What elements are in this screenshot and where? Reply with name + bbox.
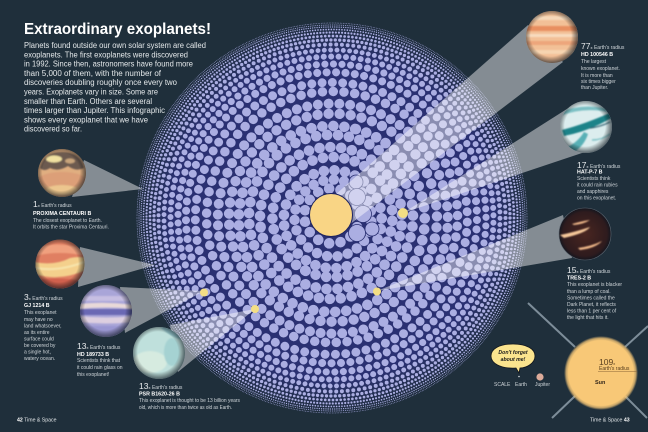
label: TrES-2 b: than a lump of coal. bbox=[567, 289, 611, 295]
label: TrES-2 b: less than 1 per cent of bbox=[567, 308, 617, 314]
speech bubble: about me! bbox=[501, 357, 526, 363]
scale comparison: SCALE bbox=[494, 382, 511, 388]
label: TrES-2 b: 15x Earth's radius bbox=[567, 265, 611, 275]
scale comparison bbox=[494, 373, 550, 388]
sun: Sun bbox=[595, 380, 606, 386]
label: HD 189733 b: Scientists think that bbox=[77, 358, 121, 364]
footer left: 42 Time & Space bbox=[17, 418, 57, 424]
label: GJ 1214 b: watery ocean. bbox=[24, 356, 55, 362]
label: HAT-P-7 b: Scientists think bbox=[577, 176, 611, 182]
marker: PSR B1620-26 b dot bbox=[251, 305, 259, 313]
label: HD 100546 b: six times bigger bbox=[581, 79, 616, 85]
label: GJ 1214 b: 3x Earth's radius bbox=[24, 292, 63, 302]
label: HD 189733 b bbox=[77, 341, 123, 378]
label: GJ 1214 b bbox=[24, 292, 63, 362]
label: HD 100546 b: known exoplanet. bbox=[581, 66, 620, 72]
label: GJ 1214 b: surface could bbox=[24, 336, 54, 342]
label: HAT-P-7 b: it could rain rubies bbox=[577, 182, 618, 188]
label: GJ 1214 b: GJ 1214 B bbox=[24, 303, 50, 309]
label: GJ 1214 b: a single hot, bbox=[24, 350, 51, 356]
intro text: than 5,000 of them, with the number of bbox=[24, 69, 162, 78]
intro text: discovered so far. bbox=[24, 125, 82, 134]
intro text: times larger than Jupiter. This infographic bbox=[24, 106, 165, 115]
marker: TrES-2 b dot bbox=[373, 288, 381, 296]
sun: Earth's radius bbox=[599, 366, 630, 372]
footer right: Time & Space 43 bbox=[590, 418, 630, 424]
planet: HD 189733 b bbox=[78, 285, 134, 337]
label: HAT-P-7 b: and sapphires bbox=[577, 189, 609, 195]
label: Proxima Centauri b: 1x Earth's radius bbox=[33, 199, 72, 209]
label: GJ 1214 b: as its entire bbox=[24, 330, 50, 336]
label: Proxima Centauri b: PROXIMA CENTAURI B bbox=[33, 211, 91, 217]
label: TrES-2 b: TRES-2 B bbox=[567, 276, 591, 282]
planet: HD 100546 b bbox=[526, 11, 578, 63]
intro text: in 1992. Since then, astronomers have found more bbox=[24, 60, 194, 69]
label: HAT-P-7 b: 17x Earth's radius bbox=[577, 160, 621, 170]
speech bubble: Don't forget bbox=[498, 350, 528, 356]
label: TrES-2 b: the light that hits it. bbox=[567, 315, 609, 321]
chart: every known exoplanet as a dot bbox=[104, 0, 560, 432]
scale comparison: Jupiter bbox=[535, 382, 550, 388]
label: GJ 1214 b: be covered by bbox=[24, 343, 56, 349]
label: HAT-P-7 b: HAT-P-7 B bbox=[577, 170, 603, 176]
scale comparison: Earth bbox=[515, 382, 527, 388]
intro text: Planets found outside our own solar system are called bbox=[24, 41, 206, 50]
intro text: years. Exoplanets vary in size. Some are bbox=[24, 88, 159, 96]
sun rays bbox=[528, 303, 648, 418]
marker: HAT-P-7 b dot bbox=[398, 208, 408, 218]
label: HD 189733 b: this exoplanet! bbox=[77, 372, 109, 378]
label: PSR B1620-26 b: PSR B1620-26 B bbox=[139, 392, 180, 398]
speech bubble bbox=[491, 344, 535, 373]
label: HD 100546 b bbox=[581, 41, 625, 91]
planet: PSR B1620-26 b bbox=[133, 327, 186, 379]
marker: Sun-like largest central dot bbox=[310, 194, 352, 236]
label: HAT-P-7 b bbox=[577, 160, 621, 202]
planet: GJ 1214 b bbox=[34, 240, 86, 290]
label: PSR B1620-26 b: This exoplanet is thought to be 13 billion years bbox=[139, 398, 240, 404]
label: GJ 1214 b: This exoplanet bbox=[24, 310, 57, 316]
sun bbox=[564, 336, 638, 410]
label: TrES-2 b: Sometimes called the bbox=[567, 296, 615, 302]
label: PSR B1620-26 b: old, which is more than twice as old as Earth. bbox=[139, 405, 232, 411]
label: GJ 1214 b: may have no bbox=[24, 317, 53, 323]
label: HD 100546 b: The largest bbox=[581, 59, 607, 65]
label: HD 189733 b: it could rain glass on bbox=[77, 365, 123, 371]
intro text bbox=[24, 41, 206, 134]
label: PSR B1620-26 b bbox=[139, 381, 240, 411]
label: TrES-2 b: This exoplanet is blacker bbox=[567, 282, 622, 288]
sun: 109x bbox=[599, 357, 615, 367]
label: Proxima Centauri b bbox=[33, 199, 109, 230]
intro text: shows every exoplanet that we have bbox=[24, 115, 149, 124]
marker: HD 189733 b dot bbox=[200, 288, 208, 296]
intro text: smaller than Earth. Others are several bbox=[24, 97, 152, 106]
label: Proxima Centauri b: It orbits the star Proxima Centauri. bbox=[33, 224, 109, 230]
label: TrES-2 b: Dark Planet, it reflects bbox=[567, 302, 616, 308]
label: PSR B1620-26 b: 13x Earth's radius bbox=[139, 381, 183, 391]
intro text: discoveries doubling roughly once every two bbox=[24, 78, 178, 87]
title: Extraordinary exoplanets! bbox=[24, 21, 211, 38]
label: HD 100546 b: 77x Earth's radius bbox=[581, 41, 625, 51]
beams linking planets to their dots bbox=[72, 25, 585, 372]
planet: TrES-2 b bbox=[559, 208, 611, 260]
label: HD 189733 b: 13x Earth's radius bbox=[77, 341, 121, 351]
intro text: exoplanets. The first exoplanets were discovered bbox=[24, 50, 188, 59]
planet: Proxima Centauri b bbox=[38, 149, 86, 197]
label: HD 100546 b: It is more than bbox=[581, 73, 613, 79]
planet: HAT-P-7 b bbox=[560, 101, 613, 153]
label: HD 100546 b: HD 100546 B bbox=[581, 52, 613, 58]
label: HD 100546 b: than Jupiter. bbox=[581, 85, 608, 91]
label: HD 189733 b: HD 189733 B bbox=[77, 352, 109, 358]
label: Proxima Centauri b: The closest exoplanet to Earth. bbox=[33, 218, 102, 224]
label: TrES-2 b bbox=[567, 265, 622, 321]
label: GJ 1214 b: land whatsoever, bbox=[24, 324, 62, 330]
label: HAT-P-7 b: on this exoplanet. bbox=[577, 196, 616, 202]
